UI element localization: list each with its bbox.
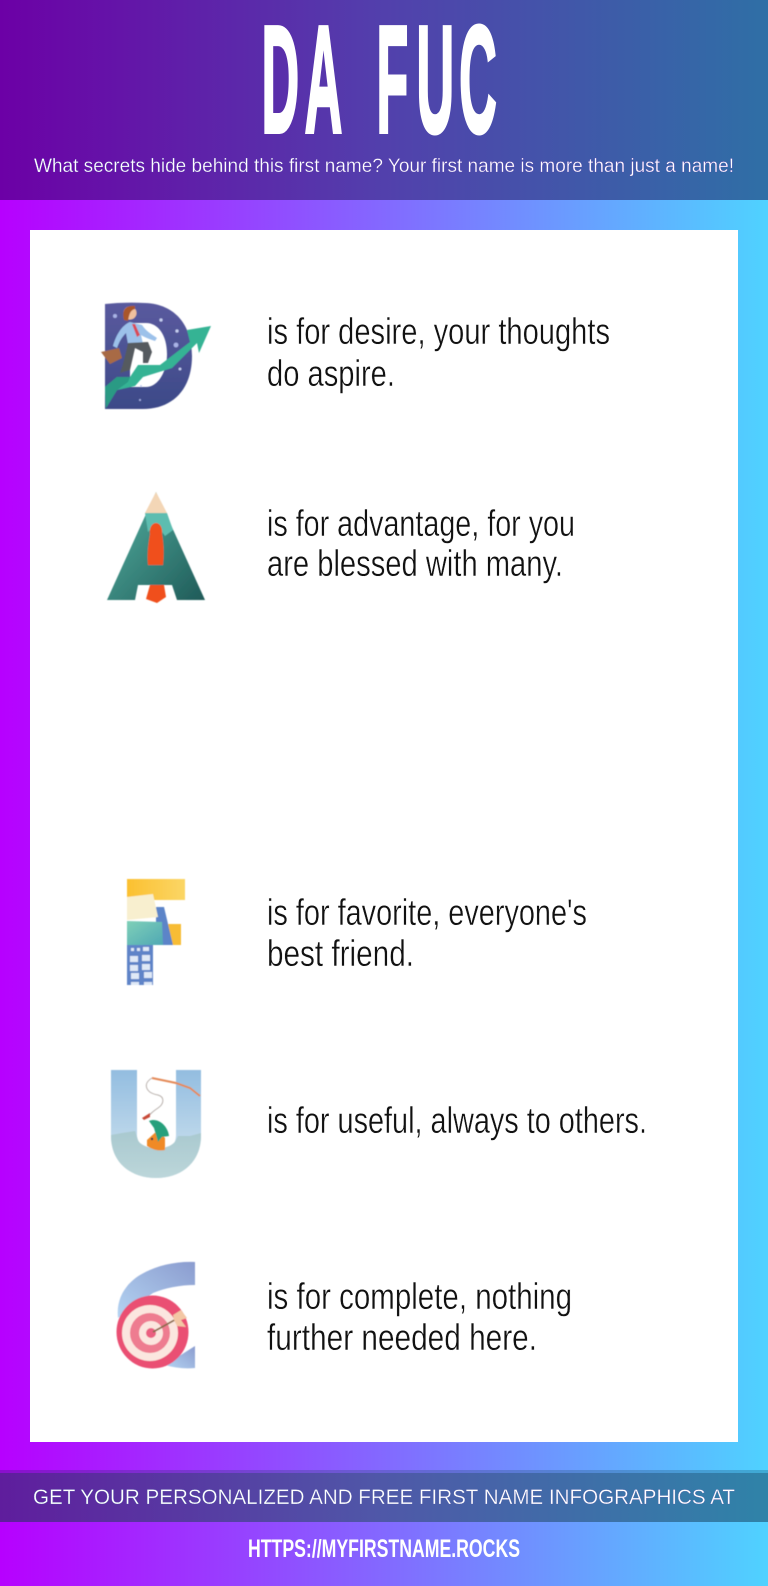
text: A line bbox=[267, 503, 575, 584]
text: C line: further needed here. bbox=[267, 1317, 537, 1358]
footer call-to-action text: GET YOUR PERSONALIZED AND FREE FIRST NAME INFOGRAPHICS AT bbox=[33, 1486, 735, 1509]
text: A line: is for advantage, for you bbox=[267, 503, 575, 544]
footer band bbox=[0, 1470, 768, 1522]
white content panel bbox=[30, 230, 738, 1442]
text: U line: is for useful, always to others. bbox=[267, 1100, 647, 1141]
text: D line bbox=[267, 311, 610, 394]
header band bbox=[0, 0, 768, 200]
subtitle: What secrets hide behind this first name? Your first name is more than just a name! bbox=[34, 155, 734, 177]
text: F line: is for favorite, everyone's bbox=[267, 892, 587, 933]
icon: letter F with documents and building bbox=[127, 879, 185, 985]
text: D line: do aspire. bbox=[267, 353, 395, 394]
text: F line: best friend. bbox=[267, 933, 414, 974]
icon: letter D with businessman on rising arrow bbox=[101, 303, 211, 409]
text: C line bbox=[267, 1276, 572, 1358]
icon: letter A with tie bbox=[107, 492, 205, 603]
text: F line bbox=[267, 892, 587, 974]
icon: letter U with fishing rod and fish bbox=[111, 1070, 201, 1178]
text: A line: are blessed with many. bbox=[267, 543, 563, 584]
icon: letter C with archery target bbox=[116, 1262, 195, 1368]
text: D line: is for desire, your thoughts bbox=[267, 311, 610, 352]
title: DA FUC bbox=[262, 0, 497, 165]
footer url: HTTPS://MYFIRSTNAME.ROCKS bbox=[248, 1535, 520, 1563]
text: C line: is for complete, nothing bbox=[267, 1276, 572, 1317]
